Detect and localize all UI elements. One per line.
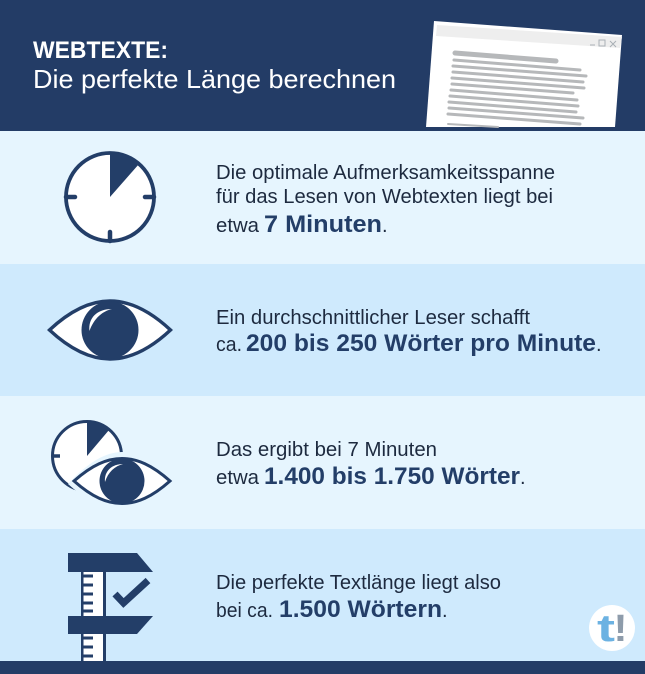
text: attention span: 7 Minuten — [264, 211, 382, 238]
logo — [589, 605, 635, 651]
text: attention span: für das Lesen von Webtexten liegt bei — [216, 186, 553, 208]
logo: ! — [614, 608, 628, 650]
title — [33, 37, 396, 94]
panel: total words — [0, 396, 645, 529]
text: attention span: etwa — [216, 215, 260, 237]
text: reading speed: ca. — [216, 334, 242, 356]
icon: clock and eye — [52, 422, 176, 510]
panel: attention span — [0, 131, 645, 264]
icon: clock — [66, 153, 154, 241]
text: perfect length: 1.500 Wörtern — [279, 596, 442, 623]
text: total words: 1.400 bis 1.750 Wörter — [264, 463, 520, 490]
text: attention span: Die optimale Aufmerksamkeitsspanne — [216, 162, 555, 184]
text: reading speed: Ein durchschnittlicher Leser schafft — [216, 307, 530, 329]
logo: t — [597, 608, 615, 650]
text: total words — [216, 439, 526, 490]
text: reading speed: 200 bis 250 Wörter pro Minute — [246, 330, 596, 357]
panel: perfect length — [0, 529, 645, 662]
text: reading speed: . — [596, 334, 602, 356]
panel: reading speed — [0, 264, 645, 396]
icon: caliper with check mark — [68, 553, 153, 662]
panel: header — [0, 0, 645, 131]
text: perfect length — [216, 572, 501, 623]
title: WEBTEXTE: — [33, 37, 168, 64]
text: total words: . — [520, 467, 526, 489]
title: Die perfekte Länge berechnen — [33, 64, 396, 94]
icon: eye — [50, 301, 170, 359]
text: perfect length: Die perfekte Textlänge liegt also — [216, 572, 501, 594]
text: perfect length: bei ca. — [216, 600, 273, 622]
footer bar — [0, 661, 645, 674]
text: total words: etwa — [216, 467, 260, 489]
text: total words: Das ergibt bei 7 Minuten — [216, 439, 437, 461]
text: attention span: . — [382, 215, 388, 237]
text: reading speed — [216, 307, 602, 357]
text: perfect length: . — [442, 600, 448, 622]
text: attention span — [216, 162, 555, 238]
icon: browser window with text — [426, 21, 622, 127]
